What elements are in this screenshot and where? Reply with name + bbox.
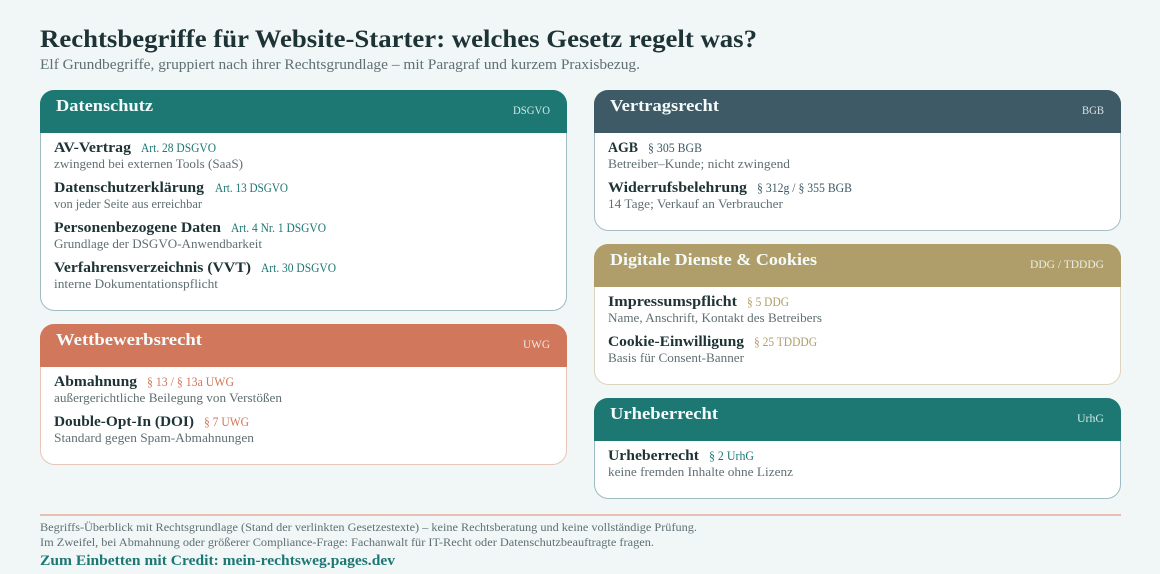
term: AV-Vertrag: zwingend bei externen Tools (SaaS) bbox=[54, 156, 243, 171]
term: Abmahnung: Abmahnung bbox=[54, 374, 138, 390]
term: Personenbezogene Daten: Art. 4 Nr. 1 DSGVO bbox=[231, 221, 326, 235]
heading: Vertragsrecht: Vertragsrecht bbox=[610, 96, 720, 115]
credit line: Zum Einbetten mit Credit: mein-rechtsweg.pages.dev bbox=[40, 553, 396, 569]
panel: Datenschutz bbox=[40, 90, 567, 310]
panel header: Vertragsrecht bbox=[594, 90, 1121, 133]
term: Personenbezogene Daten: Personenbezogene Daten bbox=[54, 220, 222, 236]
term: Cookie-Einwilligung: Cookie-Einwilligung bbox=[608, 334, 745, 350]
term: Impressumspflicht: § 5 DDG bbox=[747, 295, 789, 309]
term: Double-Opt-In: Standard gegen Spam-Abmahnungen bbox=[54, 430, 255, 445]
subtitle: Elf Grundbegriffe, gruppiert nach ihrer Rechtsgrundlage – mit Paragraf und kurzem Praxisbezug. bbox=[40, 57, 640, 73]
term: AV-Vertrag bbox=[54, 140, 243, 171]
term: Impressumspflicht: Name, Anschrift, Kontakt des Betreibers bbox=[608, 310, 822, 325]
panel: Vertragsrecht bbox=[594, 90, 1121, 230]
term: Verfahrensverzeichnis: interne Dokumentationspflicht bbox=[54, 276, 218, 291]
term: Personenbezogene Daten bbox=[54, 220, 326, 251]
term: Urheberrecht bbox=[608, 448, 793, 479]
legal basis tag: UWG: UWG bbox=[523, 339, 550, 351]
term: Verfahrensverzeichnis: Verfahrensverzeichnis (VVT) bbox=[54, 260, 251, 276]
term: Datenschutzerklärung: Art. 13 DSGVO bbox=[215, 181, 288, 195]
term: AV-Vertrag: Art. 28 DSGVO bbox=[141, 141, 216, 155]
term: Double-Opt-In bbox=[54, 414, 255, 445]
legal basis tag: UrhG: UrhG bbox=[1077, 413, 1104, 425]
term: Abmahnung bbox=[54, 374, 282, 405]
term: Abmahnung: außergerichtliche Beilegung von Verstößen bbox=[54, 390, 282, 405]
term: Double-Opt-In: Double-Opt-In (DOI) bbox=[54, 414, 194, 430]
panel: Digitale Dienste & Cookies bbox=[594, 244, 1121, 384]
term: Abmahnung: § 13 / § 13a UWG bbox=[147, 375, 234, 389]
term: Personenbezogene Daten: Grundlage der DSGVO-Anwendbarkeit bbox=[54, 236, 262, 251]
term: AGB: Betreiber–Kunde; nicht zwingend bbox=[608, 156, 791, 171]
term: Datenschutzerklärung: von jeder Seite aus erreichbar bbox=[54, 196, 203, 211]
term: Urheberrecht: § 2 UrhG bbox=[709, 449, 754, 463]
term: AGB: AGB bbox=[608, 140, 638, 156]
term: Widerrufsbelehrung bbox=[608, 180, 852, 211]
term: Impressumspflicht bbox=[608, 294, 822, 325]
panel header: Datenschutz bbox=[40, 90, 567, 133]
term: Urheberrecht: Urheberrecht bbox=[608, 448, 699, 464]
term: Double-Opt-In: § 7 UWG bbox=[204, 415, 249, 429]
term: AGB bbox=[608, 140, 791, 171]
term: AGB: § 305 BGB bbox=[648, 141, 702, 155]
footer note: Begriffs-Überblick mit Rechtsgrundlage (Stand der verlinkten Gesetzestexte) – keine Rechtsberatung und keine vollständige Prüfung. bbox=[40, 520, 697, 534]
term: Cookie-Einwilligung bbox=[608, 334, 817, 365]
term: Impressumspflicht: Impressumspflicht bbox=[608, 294, 737, 310]
term: Widerrufsbelehrung: 14 Tage; Verkauf an Verbraucher bbox=[608, 196, 784, 211]
legal basis tag: DSGVO: DSGVO bbox=[513, 105, 550, 117]
term: Urheberrecht: keine fremden Inhalte ohne Lizenz bbox=[608, 464, 793, 479]
term: Verfahrensverzeichnis bbox=[54, 260, 336, 291]
term: Cookie-Einwilligung: Basis für Consent-Banner bbox=[608, 350, 745, 365]
term: Verfahrensverzeichnis: Art. 30 DSGVO bbox=[261, 261, 336, 275]
legal basis tag: DDG / TDDDG: DDG / TDDDG bbox=[1030, 259, 1104, 271]
term: Datenschutzerklärung bbox=[54, 180, 288, 211]
heading: Urheberrecht: Urheberrecht bbox=[610, 404, 719, 423]
panel header: Urheberrecht bbox=[594, 398, 1121, 441]
footer note bbox=[40, 520, 697, 549]
term: Datenschutzerklärung: Datenschutzerklärung bbox=[54, 180, 205, 196]
legal basis tag: BGB: BGB bbox=[1082, 105, 1104, 117]
term: AV-Vertrag: AV-Vertrag bbox=[54, 140, 132, 156]
term: Widerrufsbelehrung: Widerrufsbelehrung bbox=[608, 180, 748, 196]
panel: Urheberrecht bbox=[594, 398, 1121, 498]
panel header: Digitale Dienste & Cookies bbox=[594, 244, 1121, 287]
panel header: Wettbewerbsrecht bbox=[40, 324, 567, 367]
panel: Wettbewerbsrecht bbox=[40, 324, 567, 464]
heading: Wettbewerbsrecht: Wettbewerbsrecht bbox=[56, 330, 203, 349]
heading: Datenschutz: Datenschutz bbox=[56, 96, 153, 115]
title: Rechtsbegriffe für Website-Starter: welches Gesetz regelt was? bbox=[40, 26, 757, 53]
term: Widerrufsbelehrung: § 312g / § 355 BGB bbox=[757, 181, 852, 195]
heading: Digitale Dienste & Cookies: Digitale Dienste & Cookies bbox=[610, 250, 818, 269]
footer note: Im Zweifel, bei Abmahnung oder größerer Compliance-Frage: Fachanwalt für IT-Recht oder Datenschutzbeauftragte fragen. bbox=[40, 537, 654, 549]
term: Cookie-Einwilligung: § 25 TDDDG bbox=[754, 335, 817, 349]
